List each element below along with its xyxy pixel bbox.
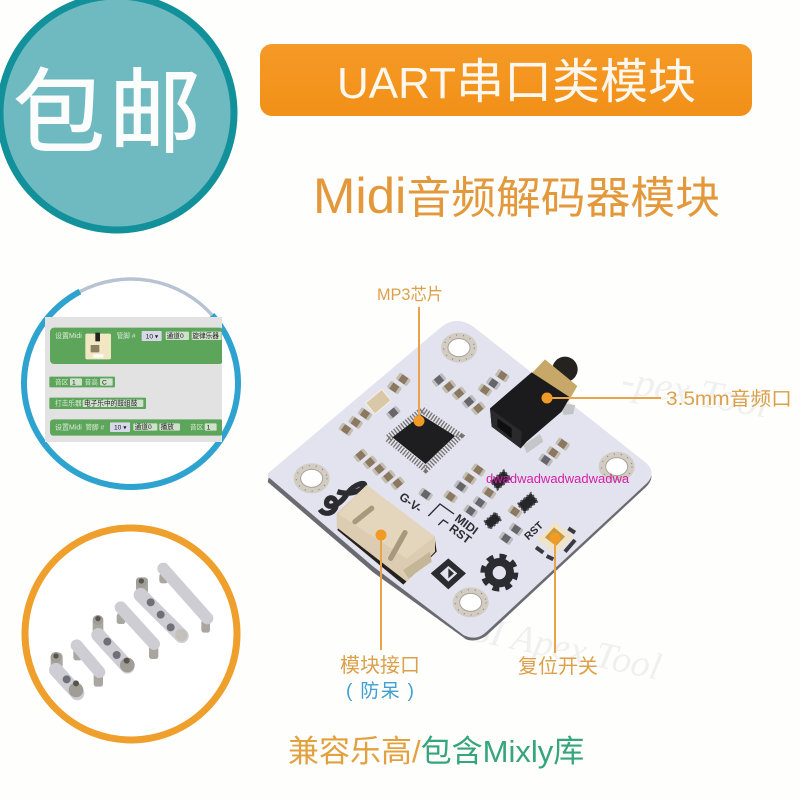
module board photo bbox=[267, 321, 652, 640]
logo D mark bbox=[431, 558, 466, 589]
callout: 3.5mm jack bbox=[542, 388, 792, 410]
block: set Midi player: 通道0 bbox=[167, 331, 184, 340]
panel: Mixly blocks in blue circle bbox=[24, 279, 238, 487]
callout: connector: 模块接口 bbox=[340, 654, 420, 677]
block: play: 管脚 # bbox=[85, 422, 104, 431]
watermark text: SI Apex Tool bbox=[468, 608, 665, 689]
header bar: UART module category bbox=[260, 44, 752, 116]
callout: MP3 chip bbox=[377, 285, 443, 426]
callout: reset switch: 复位开关 bbox=[518, 655, 598, 678]
callout: connector bbox=[340, 530, 420, 702]
block: set Midi player bbox=[50, 328, 223, 364]
reset switch bbox=[536, 522, 575, 559]
header bar: UART module category: UART串口类模块 bbox=[337, 56, 696, 109]
title: Midi audio decoder module: Midi音频解码器模块 bbox=[313, 168, 720, 224]
PH connector bbox=[337, 485, 437, 585]
board edge shadow bbox=[268, 323, 651, 640]
callout: MP3 chip: MP3芯片 bbox=[377, 285, 443, 304]
MP3 chip bbox=[387, 410, 460, 469]
peg bars bbox=[56, 569, 207, 693]
watermark text: pex Tool bbox=[50, 589, 195, 662]
block: play bbox=[50, 419, 223, 436]
footer: compatibility note: 兼容乐高/包含Mixly库 bbox=[288, 734, 584, 769]
callout: connector: ( 防呆 ) bbox=[346, 680, 414, 702]
block: play: 设置Midi bbox=[55, 422, 82, 431]
panel: Lego pegs in orange circle bbox=[25, 528, 237, 740]
watermark text: -pex Tool bbox=[618, 357, 773, 427]
small ICs bbox=[484, 470, 538, 529]
block: percussion: 电子乐中的鼓组鼓 bbox=[84, 399, 138, 408]
mounting holes bbox=[294, 333, 635, 617]
overlay text in magenta: dwadwadwadwadwadwa bbox=[486, 471, 630, 486]
block: note: 音区 bbox=[55, 377, 69, 386]
block: set Midi player: 设置Midi bbox=[55, 331, 82, 340]
block: play: 通道0 bbox=[135, 422, 152, 431]
block: set Midi player: 10 ▾ bbox=[146, 333, 159, 340]
callout: reset switch bbox=[518, 532, 598, 678]
PCB bbox=[267, 321, 652, 638]
treble clef mark bbox=[320, 483, 365, 513]
block: play: 音区 bbox=[190, 422, 204, 431]
badge: free shipping: 包邮 bbox=[13, 63, 205, 165]
peg holes and sockets bbox=[63, 598, 175, 683]
block: percussion: 打击乐器 bbox=[55, 399, 82, 408]
silkscreen labels: G-V- bbox=[397, 490, 425, 516]
block: set Midi player: 旋律乐器 bbox=[192, 331, 219, 340]
block: play: 10 ▾ bbox=[114, 424, 127, 431]
block: note bbox=[49, 377, 115, 387]
badge: free shipping bbox=[0, 0, 234, 230]
peg posts bbox=[51, 573, 210, 687]
watermark text bbox=[50, 357, 773, 689]
code blocks panel bbox=[45, 317, 223, 442]
gear logo bbox=[483, 557, 515, 589]
silkscreen labels: MIDI bbox=[452, 511, 481, 538]
audio jack bbox=[490, 357, 578, 453]
block: play: 播放 bbox=[161, 422, 174, 431]
silkscreen labels bbox=[397, 490, 546, 547]
silkscreen labels: RST bbox=[522, 519, 546, 543]
block: set Midi player: 管脚 # bbox=[117, 331, 136, 340]
silkscreen labels: RST bbox=[447, 521, 475, 547]
block: note: C bbox=[102, 379, 107, 386]
block: note: 音高 bbox=[85, 377, 98, 386]
block: play: 1 bbox=[207, 424, 211, 431]
callout: 3.5mm jack: 3.5mm音频口 bbox=[666, 388, 792, 410]
block: percussion bbox=[49, 398, 146, 409]
SMD parts bbox=[338, 369, 570, 545]
silkscreen bracket bbox=[428, 504, 454, 525]
crystal bbox=[365, 389, 391, 414]
block: note: 1 bbox=[72, 379, 76, 386]
